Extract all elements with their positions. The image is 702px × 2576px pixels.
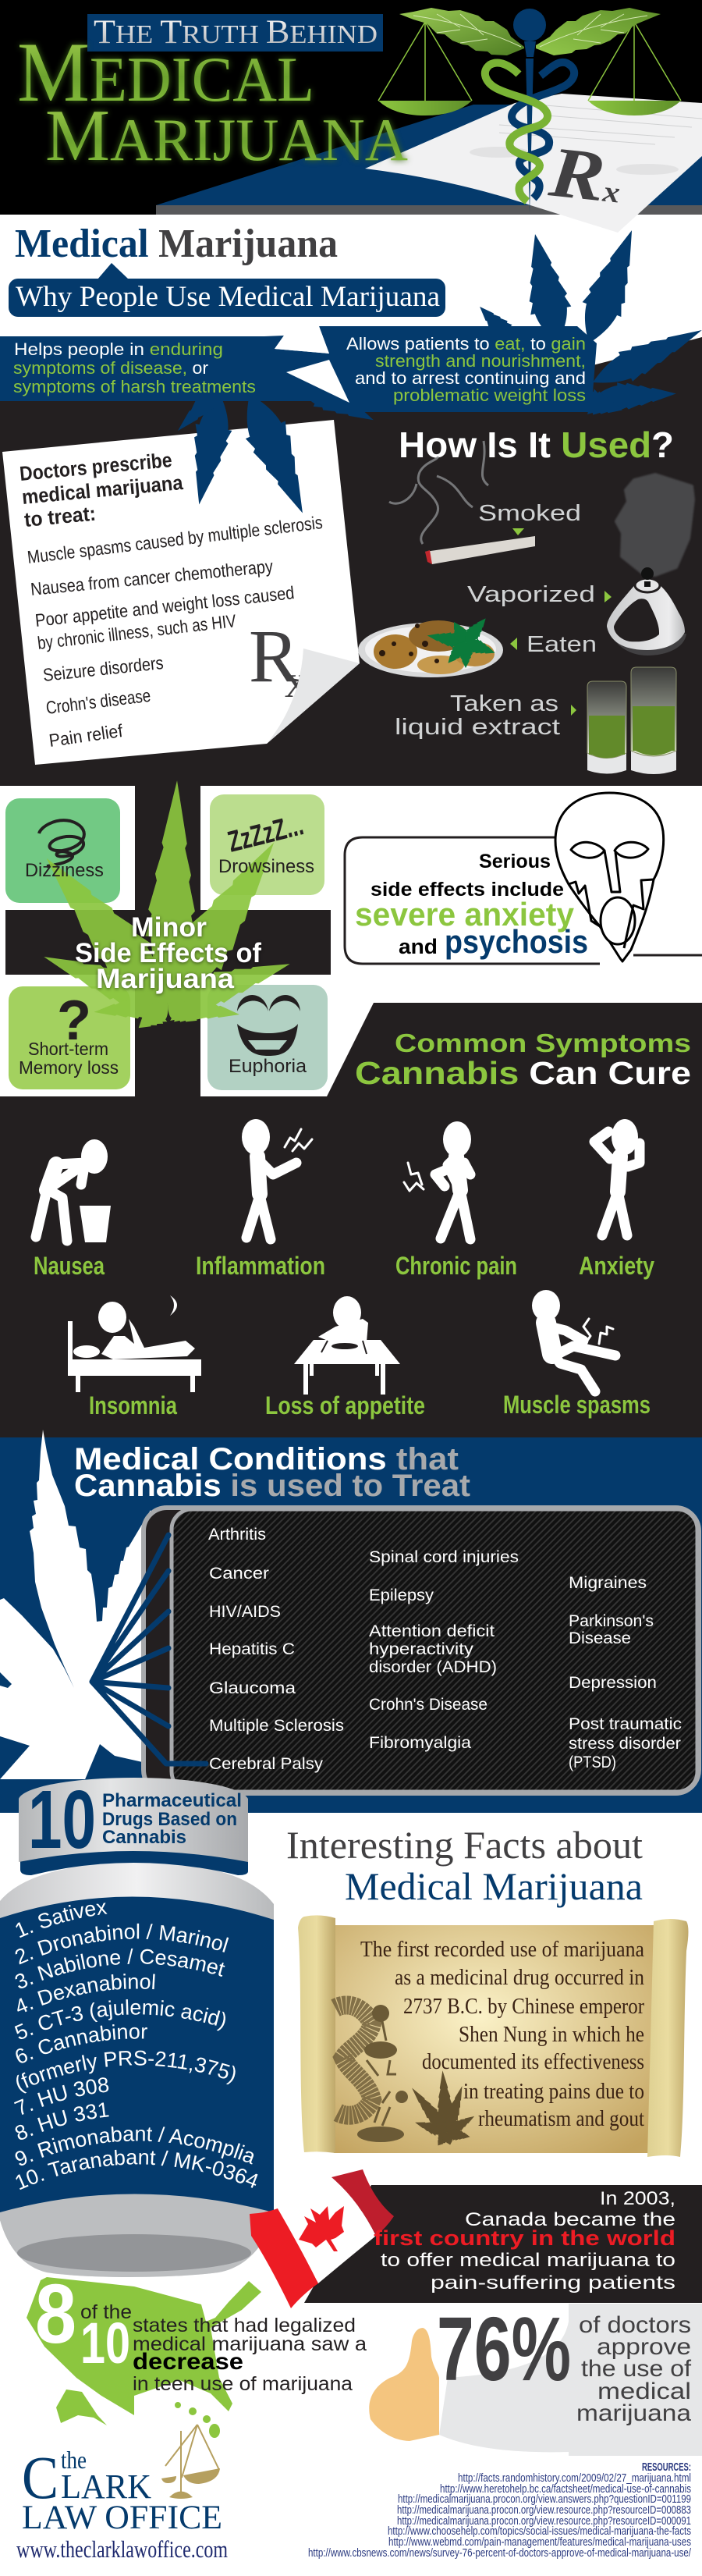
panel: 76 percent fact — [369, 2298, 702, 2456]
bottle base inset — [17, 2234, 251, 2272]
card: euphoria — [207, 985, 328, 1090]
serious text: severe anxiety — [355, 896, 575, 933]
title band — [87, 14, 383, 52]
label: vaporized: Vaporized — [467, 582, 595, 607]
card: short-term memory loss: Short-term — [28, 1039, 108, 1059]
column 2 conditions: disorder (ADHD) — [369, 1658, 497, 1676]
list of conditions: Pain relief — [48, 720, 124, 751]
heading: pharmaceutical drugs — [102, 1790, 242, 1848]
brown leaf silhouette — [406, 2070, 477, 2149]
states text: states that had legalized — [133, 2315, 356, 2336]
paper: doctors prescribe — [2, 420, 360, 765]
list of conditions: Poor appetite and weight loss caused — [34, 582, 296, 631]
serious text: side effects include — [370, 879, 564, 901]
fact text: medical — [597, 2379, 691, 2404]
label: dizziness: Dizziness — [25, 860, 104, 881]
label: liquid extract — [395, 691, 560, 740]
heading: pharmaceutical drugs: Drugs Based on — [102, 1809, 237, 1830]
label: eaten: Eaten — [526, 632, 597, 657]
Rx mark: x — [285, 656, 308, 707]
icon: anxiety figure — [594, 1119, 640, 1235]
drug list: 2. Dronabinol / Marinol — [16, 1923, 229, 1965]
icon: right scale — [588, 22, 681, 115]
icon: cigarette smoke — [389, 441, 488, 544]
side effects title: Marijuana — [96, 964, 235, 994]
list of conditions: Muscle spasms caused by multiple sclerosis — [27, 512, 324, 567]
canada text: to offer medical marijuana to — [381, 2250, 675, 2271]
serious text: Serious — [479, 851, 551, 872]
subheading bubble: Why People Use Medical Marijuana — [16, 281, 440, 313]
Rx mark: R — [249, 614, 299, 698]
column 2 conditions — [369, 1548, 519, 1752]
blue leaf, lower blades — [169, 361, 390, 522]
paper heading — [19, 448, 184, 531]
stat: 8 of 10 — [35, 2266, 132, 2375]
card: short-term memory loss: Memory loss — [19, 1057, 119, 1078]
arrow: eaten — [510, 638, 517, 650]
states text — [133, 2315, 367, 2395]
column 3 conditions: Parkinson's — [569, 1612, 654, 1630]
canada text — [374, 2188, 675, 2294]
heading: Medical Marijuana — [15, 222, 338, 266]
states text: medical marijuana saw a — [133, 2333, 367, 2355]
logo text: C — [22, 2443, 58, 2511]
states text: decrease — [133, 2349, 243, 2375]
states text: in teen use of marijuana — [133, 2373, 353, 2395]
column 2 conditions: hyperactivity — [369, 1640, 474, 1658]
column 1 conditions: Arthritis — [208, 1526, 266, 1544]
column 3 conditions: Depression — [569, 1674, 657, 1692]
column 2 conditions: Spinal cord injuries — [369, 1548, 519, 1566]
page fold — [267, 648, 360, 744]
arrow: vaporized — [604, 591, 612, 602]
column 3 conditions: Migraines — [569, 1574, 647, 1592]
drug list: (formerly PRS-211,375) — [16, 2051, 236, 2093]
callout: helps people: Helps people in enduring — [14, 339, 223, 359]
icon: joint — [425, 536, 535, 564]
fact text: of doctors — [579, 2312, 691, 2338]
dragon silhouette — [335, 2005, 408, 2142]
card: short-term memory loss — [9, 986, 130, 1089]
list of conditions: Crohn's disease — [44, 685, 152, 718]
card: euphoria: Euphoria — [229, 1056, 307, 1077]
panel: states fact — [27, 2266, 367, 2438]
column 1 conditions: HIV/AIDS — [209, 1603, 281, 1621]
stat: 76 percent: 76% — [437, 2298, 571, 2400]
blue leaf, upper blades — [472, 223, 702, 423]
drug list — [14, 1903, 257, 2190]
paper heading: to treat: — [23, 502, 97, 531]
serious text: and — [399, 935, 438, 958]
label: smoked: Smoked — [478, 501, 581, 526]
column 1 conditions: Cerebral Palsy — [209, 1755, 324, 1773]
icon: chronic pain figure — [404, 1121, 471, 1239]
canada text: In 2003, — [600, 2188, 675, 2209]
list of conditions — [27, 512, 324, 751]
panel: common symptoms — [0, 1003, 702, 1437]
heading: Medical Conditions that — [74, 1442, 459, 1476]
label: anxiety: Anxiety — [579, 1252, 654, 1280]
heading — [355, 1029, 691, 1091]
panel: pill bottle with 10 drugs — [0, 1774, 274, 2277]
scroll text: as a medicinal drug occurred in — [395, 1966, 644, 1990]
drug list: 9. Rimonabant / Acomplia — [16, 2127, 254, 2166]
label: insomnia: Insomnia — [89, 1391, 177, 1419]
scroll text: rheumatism and gout — [478, 2107, 644, 2131]
column 1 conditions: Multiple Sclerosis — [209, 1717, 344, 1735]
side effects title — [75, 912, 261, 994]
heading: How Is It Used? — [399, 425, 674, 465]
icon: nausea figure — [36, 1139, 111, 1242]
column 3 conditions: (PTSD) — [569, 1753, 616, 1771]
icon: thumbs up — [369, 2322, 569, 2452]
heading: Common Symptoms — [395, 1029, 691, 1057]
paper heading: Doctors prescribe — [19, 448, 173, 485]
callout: helps people — [13, 339, 256, 396]
fact text: the use of — [581, 2356, 692, 2382]
logo text: LARK — [61, 2468, 151, 2506]
column 2 conditions: Epilepsy — [369, 1586, 434, 1604]
resources — [308, 2461, 692, 2560]
heading: pharmaceutical drugs: Pharmaceutical — [102, 1790, 242, 1811]
scroll text: Shen Nung in which he — [459, 2023, 644, 2047]
side effects title: Minor — [131, 912, 207, 943]
heading: interesting facts: Interesting Facts about — [286, 1823, 643, 1867]
icon: caduceus with leaves — [399, 8, 661, 212]
logo text: LAW OFFICE — [22, 2500, 222, 2536]
drug list: 8. HU 331 — [16, 2102, 109, 2140]
heading: interesting facts — [286, 1823, 643, 1908]
icon: left scale — [378, 22, 472, 115]
callout: helps people: symptoms of disease, or — [13, 358, 208, 378]
panel: medical conditions — [0, 1430, 702, 1813]
label: drowsiness: Drowsiness — [218, 856, 314, 877]
column 2 conditions: Fibromyalgia — [369, 1734, 471, 1752]
heading — [74, 1442, 470, 1503]
icon: vapor cloud — [616, 474, 693, 575]
icon: extract glasses — [587, 667, 676, 774]
callout: allows patients: and to arrest continuing and — [355, 368, 586, 388]
heading: interesting facts: Medical Marijuana — [345, 1864, 643, 1908]
column 1 conditions — [208, 1526, 344, 1773]
panel: header — [0, 0, 702, 233]
icon: plate of cookies — [358, 613, 503, 677]
prescription paper — [365, 94, 702, 233]
label: inflammation: Inflammation — [196, 1252, 325, 1280]
column 2 conditions: Attention deficit — [369, 1622, 495, 1640]
drug list: 7. HU 308 — [14, 2077, 109, 2115]
stat: 8 of 10: 10 — [80, 2311, 130, 2375]
bottle body — [0, 1863, 274, 2277]
logo text: the — [61, 2446, 87, 2474]
label: liquid extract: Taken as — [450, 691, 558, 716]
side effects title: Side Effects of — [75, 938, 261, 968]
callout: allows patients — [346, 334, 586, 405]
label: chronic pain: Chronic pain — [395, 1252, 517, 1280]
panel: minor side effects — [5, 780, 331, 1096]
fact text: marijuana — [576, 2400, 691, 2426]
scroll text: 2737 B.C. by Chinese emperor — [403, 1995, 645, 2019]
stat: 8 of 10: 8 — [35, 2266, 76, 2361]
left and right blue text bands — [0, 326, 597, 412]
icon: screaming face — [555, 793, 664, 961]
card: short-term memory loss: ? — [57, 990, 91, 1052]
logo text — [22, 2443, 222, 2536]
label: loss of appetite: Loss of appetite — [265, 1391, 425, 1419]
icon: logo scales — [161, 2425, 220, 2499]
scroll text: The first recorded use of marijuana — [360, 1938, 645, 1962]
serious text — [355, 851, 588, 960]
callout: helps people: symptoms of harsh treatments — [13, 377, 256, 396]
scroll text — [360, 1938, 645, 2131]
panel: canada fact — [250, 2169, 702, 2308]
bottle label — [0, 1896, 274, 2212]
fact text — [576, 2312, 692, 2426]
green cannabis leaf — [27, 780, 296, 1038]
website: www.theclarklawoffice.com — [16, 2535, 228, 2563]
subheading bubble — [9, 263, 445, 317]
canada text: Canada became the — [465, 2209, 675, 2230]
Rx on paper: Rx — [545, 131, 626, 219]
serious text: psychosis — [445, 923, 588, 960]
column 3 conditions: Post traumatic — [569, 1715, 682, 1733]
canada text: first country in the world — [374, 2226, 675, 2250]
column 3 conditions — [569, 1574, 682, 1771]
paper heading: medical marijuana — [21, 471, 184, 509]
drug list: 5. CT-3 (ajulemic acid) — [14, 1999, 225, 2039]
drug list: 6. Cannabinor — [16, 2024, 147, 2063]
arrow: smoked — [512, 528, 524, 535]
icon: white cannabis leaf — [0, 1430, 156, 1783]
title line 3: MARIJUANA — [45, 95, 408, 176]
drug list: 4. Dexanabinol — [17, 1974, 155, 2012]
scroll with fact — [298, 1915, 688, 2157]
stat: 8 of 10: of the — [80, 2301, 132, 2323]
rays — [92, 1535, 206, 1764]
logo: the clark law office — [16, 2425, 228, 2563]
icon: canadian flag — [250, 2169, 394, 2308]
label: nausea: Nausea — [34, 1252, 105, 1280]
list of conditions: by chronic illness, such as HIV — [37, 610, 237, 653]
column 3 conditions: stress disorder — [569, 1735, 681, 1753]
icon: vaporizer — [607, 567, 686, 656]
title line 1: THE TRUTH BEHIND — [94, 14, 378, 51]
title line 2: MEDICAL — [17, 25, 314, 119]
icon: inflammation figure — [242, 1119, 312, 1239]
fact text: approve — [597, 2334, 691, 2360]
usa map — [27, 2277, 261, 2438]
list of conditions: Nausea from cancer chemotherapy — [30, 556, 274, 599]
callout: serious side effects — [345, 793, 702, 964]
label: liquid extract: liquid extract — [395, 715, 560, 740]
panel: how is it used — [358, 425, 693, 774]
drug list: 1. Sativex — [16, 1903, 108, 1938]
conditions panel frame — [144, 1508, 699, 1793]
column 1 conditions: Glaucoma — [209, 1679, 296, 1697]
callout: allows patients: problematic weight loss — [393, 386, 586, 405]
card: drowsiness — [210, 794, 324, 895]
scroll text: in treating pains due to — [463, 2080, 644, 2104]
cap — [19, 1778, 248, 1875]
card: drowsiness: ZzZzZ... — [225, 808, 307, 859]
label: muscle spasms: Muscle spasms — [503, 1391, 651, 1419]
list of conditions: Seizure disorders — [42, 652, 165, 685]
panel: why people use medical marijuana — [0, 222, 702, 786]
arrow: liquid extract — [571, 705, 576, 716]
callout: allows patients: Allows patients to eat, to gain — [346, 334, 586, 354]
icon: muscle spasm figure — [532, 1290, 615, 1391]
heading: pharmaceutical drugs: Cannabis — [102, 1827, 186, 1848]
column 1 conditions: Hepatitis C — [209, 1640, 295, 1658]
icon: loss of appetite figure — [294, 1296, 400, 1395]
column 3 conditions: Disease — [569, 1629, 631, 1647]
drug list: 10. Taranabant / MK-0364 — [16, 2149, 257, 2190]
icon: insomnia figure — [68, 1295, 201, 1392]
heading: Cannabis Can Cure — [355, 1055, 691, 1091]
column 2 conditions: Crohn's Disease — [369, 1696, 488, 1714]
heading: Cannabis is used to Treat — [74, 1469, 470, 1503]
scroll text: documented its effectiveness — [422, 2050, 644, 2074]
heading: 10: 10 — [28, 1774, 96, 1866]
callout: allows patients: strength and nourishment, — [375, 351, 586, 371]
drug list: 3. Nabilone / Cesamet — [16, 1948, 225, 1988]
card: dizziness — [5, 798, 120, 903]
bottle lower part — [0, 2193, 274, 2277]
canada text: pain-suffering patients — [431, 2272, 675, 2294]
column 1 conditions: Cancer — [209, 1565, 269, 1583]
